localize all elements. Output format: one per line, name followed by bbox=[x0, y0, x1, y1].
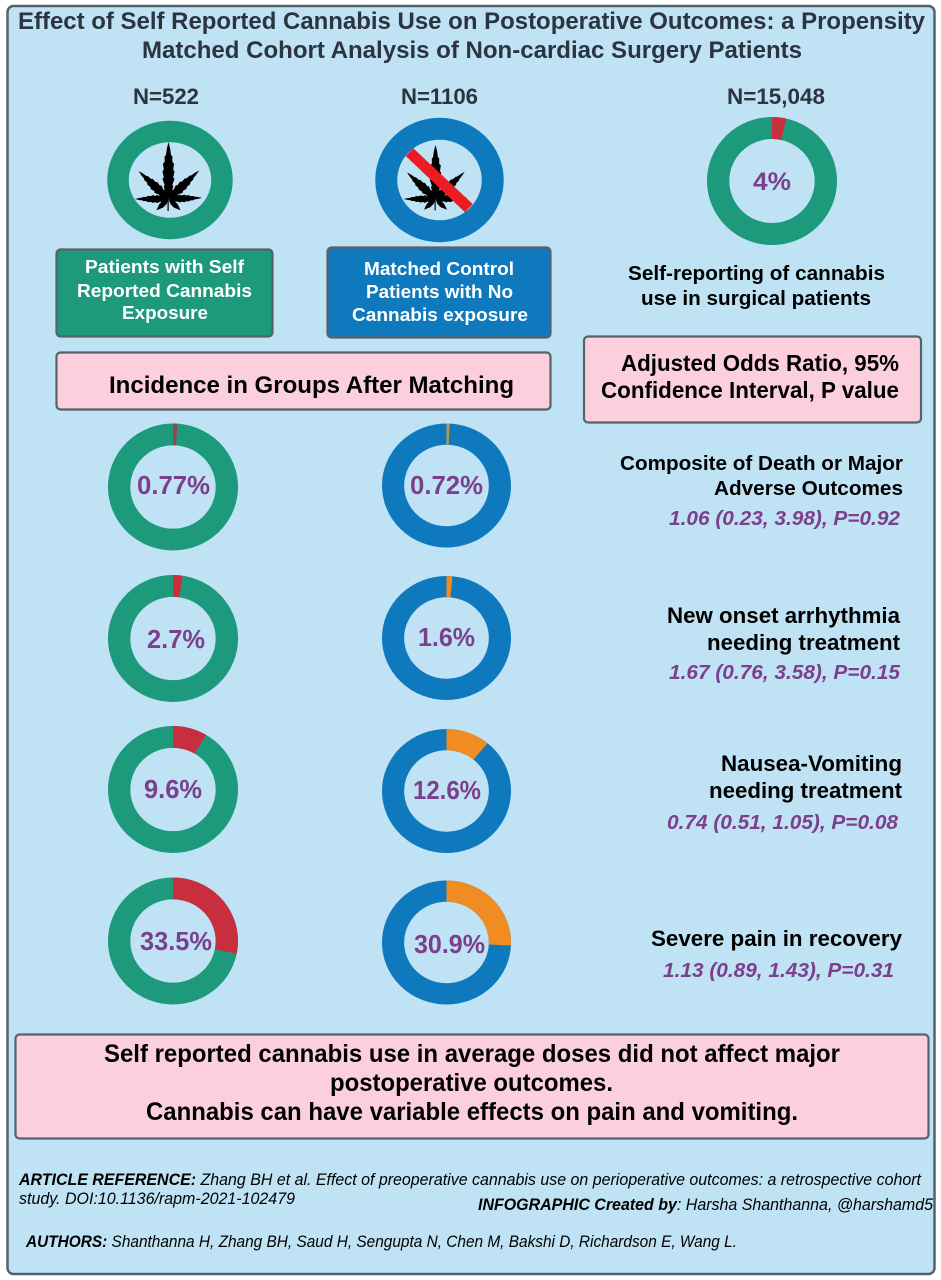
heading: adjusted odds ratio: Adjusted Odds Ratio, 95% bbox=[621, 350, 899, 376]
result: nausea-vomiting bbox=[667, 751, 903, 834]
label box: cannabis exposure: Exposure bbox=[122, 302, 208, 323]
heading: incidence in groups: Incidence in Groups After Matching bbox=[109, 372, 514, 399]
caption: self-reporting of cannabis bbox=[628, 263, 885, 310]
donut: cannabis 2.7 percent bbox=[119, 586, 227, 691]
donut: control 30.9 percent: 30.9% bbox=[414, 929, 485, 959]
result: nausea-vomiting: needing treatment bbox=[709, 778, 903, 803]
result: composite of death or major adverse outcomes: 1.06 (0.23, 3.98), P=0.92 bbox=[669, 508, 900, 530]
sample size: N=522: N=522 bbox=[133, 84, 199, 109]
label box: cannabis exposure bbox=[56, 250, 272, 336]
donut: control 1.6 percent bbox=[393, 587, 500, 689]
label box: no cannabis exposure: Cannabis exposure bbox=[352, 304, 528, 325]
column: cannabis group bbox=[56, 84, 272, 336]
column: overall self-reporting bbox=[628, 84, 885, 310]
caption: self-reporting of cannabis: use in surgical patients bbox=[641, 288, 871, 310]
donut: control 12.6 percent: 12.6% bbox=[413, 775, 481, 805]
donut: cannabis 9.6 percent bbox=[119, 737, 227, 842]
heading: adjusted odds ratio bbox=[584, 336, 921, 422]
heading: adjusted odds ratio: Confidence Interval, P value bbox=[601, 377, 899, 403]
donut: cannabis 33.5 percent: 33.5% bbox=[140, 926, 212, 956]
row: composite outcome bbox=[119, 434, 903, 540]
title: Effect of Self Reported Cannabis Use on Postoperative Outcomes: a Propensity bbox=[18, 8, 926, 35]
donut: control 0.72 percent: 0.72% bbox=[410, 470, 483, 500]
result: severe pain in recovery: Severe pain in recovery bbox=[651, 926, 903, 951]
donut: cannabis 2.7 percent: 2.7% bbox=[147, 624, 205, 654]
result: composite of death or major adverse outcomes: Composite of Death or Major bbox=[620, 453, 903, 475]
label box: no cannabis exposure: Matched Control bbox=[364, 258, 514, 279]
title: Matched Cohort Analysis of Non-cardiac Surgery Patients bbox=[142, 37, 802, 64]
donut: control 30.9 percent bbox=[393, 891, 500, 994]
icon: cannabis leaf in green ring bbox=[118, 132, 222, 228]
donut: control 12.6 percent bbox=[393, 740, 500, 842]
result: severe pain in recovery: 1.13 (0.89, 1.43), P=0.31 bbox=[663, 960, 894, 982]
result: new onset arrhythmia: New onset arrhythmia bbox=[667, 603, 901, 628]
article reference: ARTICLE REFERENCE: Zhang BH et al. Effect of preoperative cannabis use on perioperative outcomes: a retrospective cohort bbox=[18, 1171, 922, 1189]
result: new onset arrhythmia bbox=[667, 603, 901, 684]
donut: 4 percent self-reporting: 4% bbox=[753, 168, 791, 196]
sample size: N=1106: N=1106 bbox=[401, 84, 478, 109]
donut: control 0.72 percent bbox=[393, 434, 500, 537]
result: nausea-vomiting: 0.74 (0.51, 1.05), P=0.08 bbox=[667, 812, 899, 834]
result: composite of death or major adverse outcomes bbox=[620, 453, 903, 530]
donut: control 1.6 percent: 1.6% bbox=[418, 622, 475, 652]
label box: no cannabis exposure bbox=[328, 248, 550, 338]
conclusion box bbox=[16, 1034, 928, 1138]
conclusion box: Cannabis can have variable effects on pain and vomiting. bbox=[146, 1098, 798, 1126]
infographic credit: INFOGRAPHIC Created by: Harsha Shanthanna, @harshamd5 bbox=[478, 1196, 934, 1214]
row: nausea and vomiting bbox=[119, 737, 903, 842]
label box: no cannabis exposure: Patients with No bbox=[366, 281, 513, 302]
authors: AUTHORS: Shanthanna H, Zhang BH, Saud H, Sengupta N, Chen M, Bakshi D, Richardson E, Wang L. bbox=[25, 1233, 737, 1251]
result: new onset arrhythmia: needing treatment bbox=[707, 630, 901, 655]
icon: crossed-out cannabis leaf in blue ring bbox=[386, 129, 493, 231]
donut: 4 percent self-reporting bbox=[718, 128, 826, 234]
conclusion box: postoperative outcomes. bbox=[330, 1069, 613, 1097]
row: arrhythmia bbox=[119, 586, 901, 691]
article reference bbox=[18, 1171, 922, 1208]
donut: cannabis 0.77 percent: 0.77% bbox=[137, 470, 210, 500]
result: nausea-vomiting: Nausea-Vomiting bbox=[721, 751, 902, 776]
donut: cannabis 9.6 percent: 9.6% bbox=[144, 774, 202, 804]
donut: cannabis 0.77 percent bbox=[119, 434, 227, 540]
result: severe pain in recovery bbox=[651, 926, 903, 982]
column: control group bbox=[328, 84, 550, 338]
sample size: N=15,048: N=15,048 bbox=[727, 84, 825, 109]
donut: cannabis 33.5 percent bbox=[119, 888, 227, 994]
conclusion box: Self reported cannabis use in average doses did not affect major bbox=[104, 1040, 840, 1068]
result: new onset arrhythmia: 1.67 (0.76, 3.58), P=0.15 bbox=[669, 662, 901, 684]
caption: self-reporting of cannabis: Self-reporting of cannabis bbox=[628, 263, 885, 285]
label box: cannabis exposure: Reported Cannabis bbox=[77, 280, 252, 301]
label box: cannabis exposure: Patients with Self bbox=[85, 256, 245, 277]
article reference: study. DOI:10.1136/rapm-2021-102479 bbox=[19, 1190, 295, 1208]
heading: incidence in groups bbox=[56, 352, 550, 410]
title bbox=[18, 8, 926, 64]
row: severe pain bbox=[119, 888, 903, 994]
result: composite of death or major adverse outcomes: Adverse Outcomes bbox=[714, 478, 903, 500]
